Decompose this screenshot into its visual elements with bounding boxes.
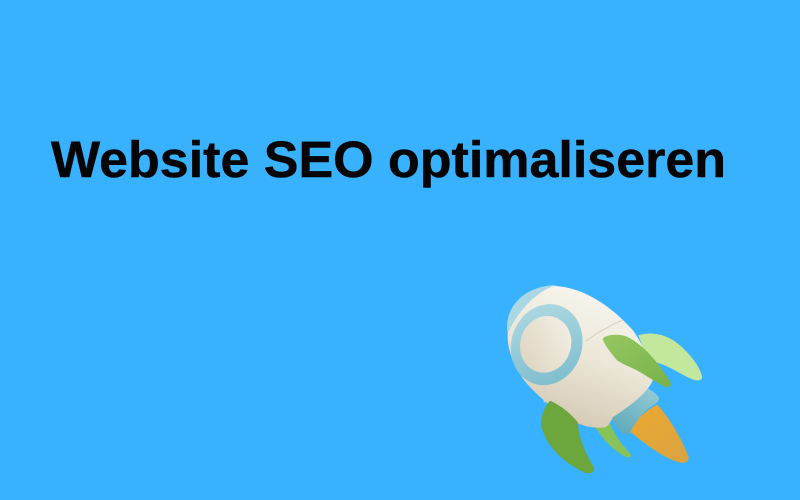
title: Website SEO optimaliseren xyxy=(51,131,726,188)
body seam lines xyxy=(544,320,623,403)
front right fin xyxy=(603,335,671,387)
flame xyxy=(629,405,689,463)
back right fin xyxy=(638,334,702,380)
nozzle xyxy=(610,385,659,435)
back lower fin xyxy=(595,423,631,457)
window ring xyxy=(500,295,593,395)
icon: rocket xyxy=(500,285,702,473)
rocket body xyxy=(508,286,653,428)
window xyxy=(513,309,579,379)
front left fin xyxy=(541,401,594,473)
nose cap xyxy=(507,285,557,331)
